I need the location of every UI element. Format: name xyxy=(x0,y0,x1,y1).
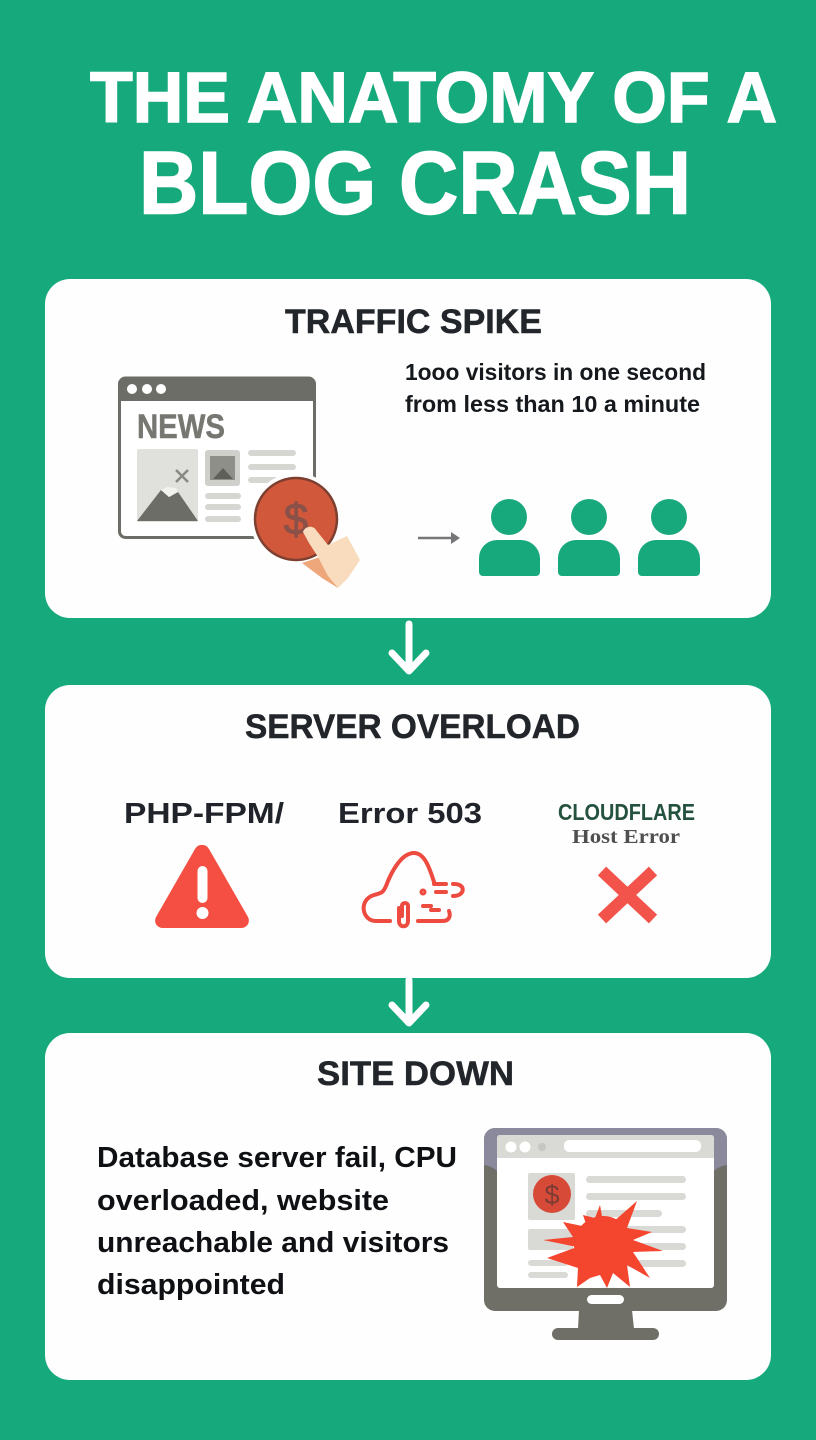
text: site down description: disappointed xyxy=(97,1269,285,1301)
monitor body xyxy=(484,1128,727,1311)
panel: site down xyxy=(45,1033,771,1380)
title: BLOG CRASH xyxy=(139,132,691,232)
icon: visitor 1 xyxy=(479,499,540,576)
label: cloudflare host error xyxy=(558,799,695,848)
icon: three visitors xyxy=(479,499,700,576)
icon: visitor 3 xyxy=(638,499,700,576)
arrow: traffic to overload xyxy=(392,624,426,671)
text: site down description xyxy=(97,1142,457,1301)
heading: server overload: SERVER OVERLOAD xyxy=(245,708,580,746)
icon: crashed monitor: $ xyxy=(544,1180,560,1210)
icon: news browser window: NEWS xyxy=(137,408,225,446)
text: visitors description xyxy=(405,359,706,417)
icon: news browser window xyxy=(118,378,315,538)
page content lines xyxy=(528,1173,686,1278)
title: THE ANATOMY OF A xyxy=(90,59,777,138)
label: cloudflare host error: Host Error xyxy=(572,826,680,848)
title xyxy=(90,59,777,232)
icon: dollar coin with hand: $ xyxy=(284,495,308,544)
icon: dollar coin with hand xyxy=(250,473,360,588)
label: php-fpm: PHP-FPM/ xyxy=(124,798,284,830)
icon: red x xyxy=(602,871,653,919)
label: error 503: Error 503 xyxy=(338,798,482,830)
label: cloudflare host error: CLOUDFLARE xyxy=(558,799,695,825)
icon: crashed monitor xyxy=(484,1128,727,1340)
text: site down description: Database server fail, CPU xyxy=(97,1142,457,1174)
text: site down description: unreachable and visitors xyxy=(97,1227,449,1259)
red splat xyxy=(543,1201,663,1288)
arrow: overload to down xyxy=(392,980,426,1023)
text: visitors description: from less than 10 a minute xyxy=(405,391,700,417)
icon: warning triangle xyxy=(155,845,249,928)
text: visitors description: 1ooo visitors in one second xyxy=(405,359,706,385)
heading: site down: SITE DOWN xyxy=(317,1055,514,1093)
panel: server overload xyxy=(45,685,771,978)
text: site down description: overloaded, website xyxy=(97,1185,389,1217)
icon: visitor 2 xyxy=(558,499,620,576)
panel: traffic spike xyxy=(45,279,771,618)
icon: small arrow xyxy=(418,532,460,544)
icon: broken cloud xyxy=(364,853,463,926)
heading: traffic spike: TRAFFIC SPIKE xyxy=(285,303,542,341)
coin xyxy=(533,1175,571,1213)
monitor stand xyxy=(578,1310,634,1329)
